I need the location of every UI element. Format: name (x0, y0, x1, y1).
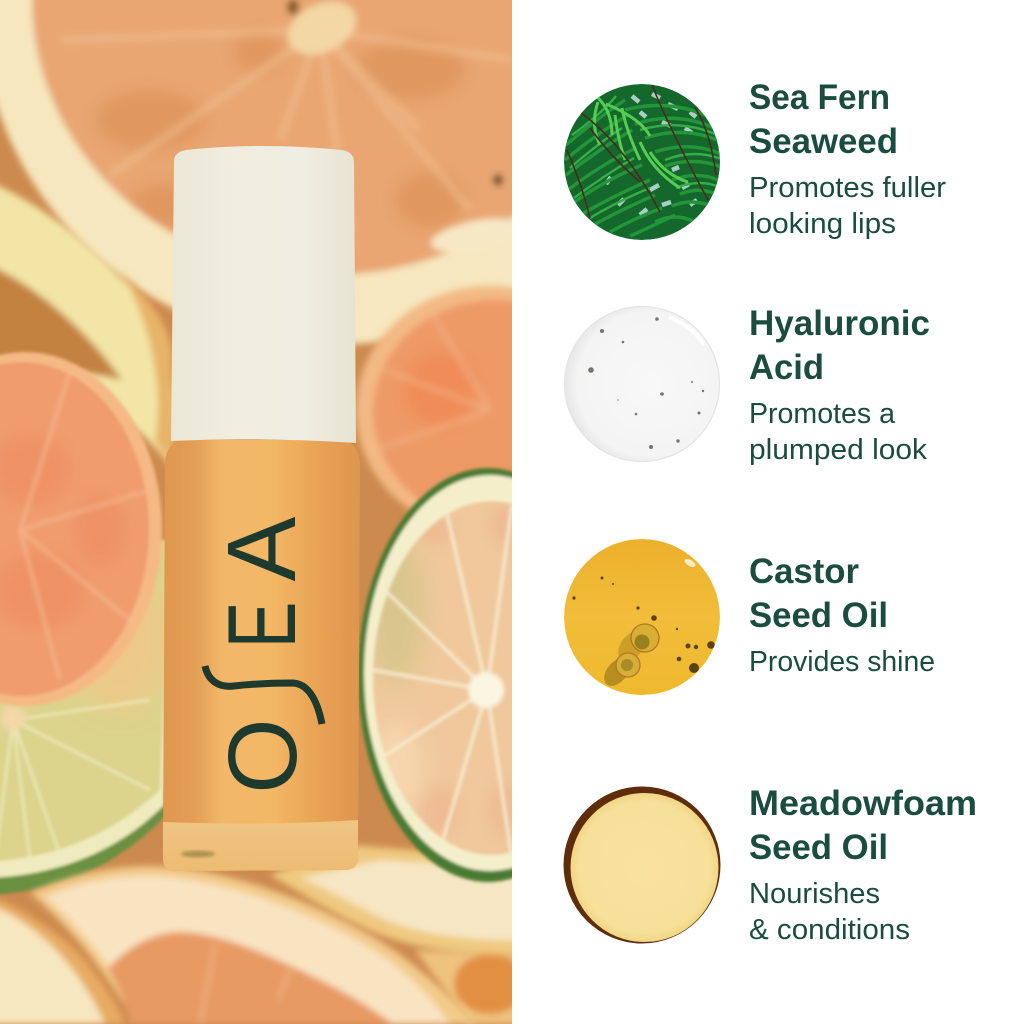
description: Nourishes & conditions: Nourishes (749, 878, 880, 910)
bottle cap (171, 146, 356, 443)
ingredient: hyaluronic acid (564, 304, 930, 466)
ingredient: meadowfoam seed oil: & conditions (749, 914, 910, 946)
icon: fern photo circle (564, 84, 724, 240)
bottle: lip oil product (163, 146, 360, 871)
citrus: left lime slice (0, 540, 170, 895)
citrus: bottom right pale slice (270, 845, 540, 1024)
logo: OSEA wordmark (205, 516, 322, 794)
ingredient: hyaluronic acid: Acid (749, 348, 824, 387)
logo letter O: O (208, 718, 317, 794)
description: Promotes fuller looking lips: Promotes fuller (749, 172, 947, 204)
citrus: right lime slice (358, 466, 512, 884)
ingredient: sea fern seaweed (564, 78, 947, 240)
heading: Castor Seed Oil: Castor (749, 552, 859, 591)
heading: Hyaluronic Acid: Hyaluronic (749, 304, 930, 343)
icon: meadowfoam oil circle (564, 786, 720, 944)
logo letter E: E (207, 602, 316, 648)
description: Provides shine: Provides shine (749, 646, 935, 678)
ingredient: castor seed oil: Seed Oil (749, 596, 888, 635)
citrus: right orange slice (356, 282, 512, 511)
panel: citrus photo background (0, 0, 512, 1024)
citrus: bottom grapefruit slice (30, 866, 476, 1024)
logo letter A: A (207, 516, 316, 581)
ingredient: meadowfoam seed oil (564, 784, 977, 946)
ingredient: sea fern seaweed: looking lips (749, 208, 896, 240)
citrus: bottom left slice (0, 895, 125, 1024)
ingredient: sea fern seaweed: Seaweed (749, 122, 898, 161)
citrus: upper left slice (0, 178, 175, 470)
heading: Meadowfoam Seed Oil: Meadowfoam (749, 784, 977, 823)
ingredient: meadowfoam seed oil: Seed Oil (749, 828, 888, 867)
icon: castor oil circle (564, 539, 720, 695)
citrus: top grapefruit slice (0, 0, 512, 348)
bottle body (163, 440, 360, 871)
bottle glass base (163, 820, 358, 871)
ingredient: hyaluronic acid: plumped look (749, 434, 928, 466)
ingredient: castor seed oil (564, 539, 935, 695)
heading: Sea Fern Seaweed: Sea Fern (749, 78, 890, 117)
icon: hyaluronic acid gel circle (564, 306, 720, 462)
description: Promotes a plumped look: Promotes a (749, 398, 895, 430)
logo letter S (205, 666, 322, 724)
citrus: left orange slice (0, 352, 162, 706)
